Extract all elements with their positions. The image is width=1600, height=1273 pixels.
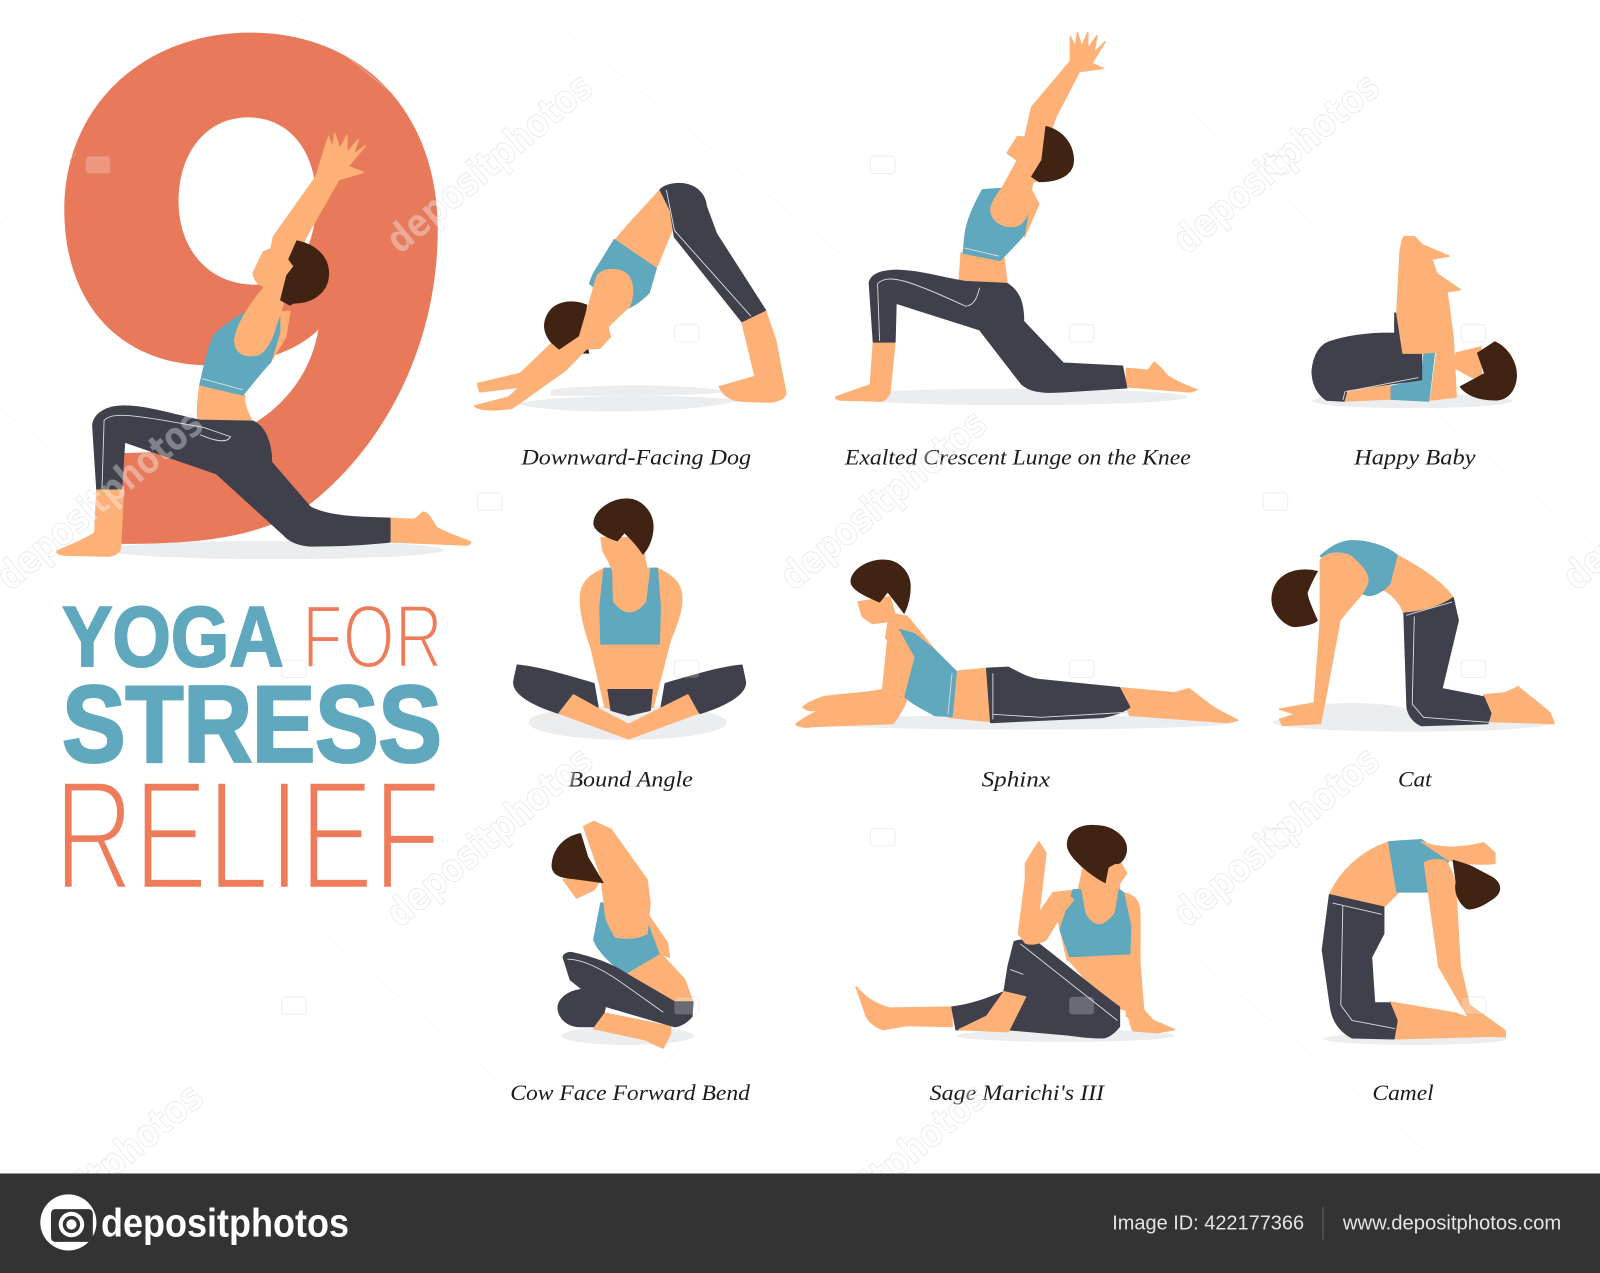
marichi leggings xyxy=(952,940,1119,1038)
dog hair xyxy=(545,302,589,353)
lunge back foot xyxy=(1127,362,1197,392)
divider xyxy=(1322,1207,1323,1240)
camel hair xyxy=(1453,860,1500,909)
hero leggings xyxy=(93,406,390,546)
cow waist xyxy=(626,953,693,1002)
text: depositphotos xyxy=(771,1075,996,1273)
bound feet xyxy=(559,695,698,739)
camel arm xyxy=(1424,860,1505,1037)
website: www.depositphotos.com xyxy=(1342,1213,1561,1235)
lunge hand xyxy=(1070,33,1105,71)
title word RELIEF: RELIEF xyxy=(54,748,441,923)
hero waist xyxy=(198,385,253,423)
pose: cat xyxy=(1272,541,1554,792)
title xyxy=(54,587,443,923)
baby hair xyxy=(1460,342,1516,400)
pose: cow face forward bend xyxy=(510,821,751,1105)
sphinx caption: Sphinx xyxy=(982,767,1050,792)
dog back leg and foot xyxy=(719,310,786,402)
lunge legging seams xyxy=(878,279,980,341)
lunge arm xyxy=(991,61,1085,227)
pose: bound angle xyxy=(514,499,745,792)
bound top xyxy=(600,568,660,644)
title word FOR: FOR xyxy=(302,587,443,687)
baby legs and arm xyxy=(1397,237,1460,400)
camel neck and head xyxy=(1421,842,1495,864)
sphinx shadow xyxy=(806,715,1235,730)
marichi extended leg and foot xyxy=(856,987,952,1030)
camel abdomen xyxy=(1330,842,1401,907)
cow caption: Cow Face Forward Bend xyxy=(510,1080,751,1105)
camel caption: Camel xyxy=(1372,1080,1434,1105)
baby shadow xyxy=(1312,394,1512,408)
lunge face xyxy=(1007,137,1046,182)
marichi legging seam xyxy=(1010,944,1117,1020)
big number 9 xyxy=(64,33,438,544)
baby top xyxy=(1390,350,1435,401)
camel shadow xyxy=(1323,1033,1507,1045)
marichi top xyxy=(1060,890,1131,958)
lunge shadow xyxy=(841,389,1188,405)
dog far arm xyxy=(478,344,566,392)
bound hair xyxy=(594,499,653,554)
cat top xyxy=(1320,541,1397,595)
cat shadows xyxy=(1272,713,1554,732)
image id: Image ID: 422177366 xyxy=(1112,1213,1304,1235)
hero shadow xyxy=(107,541,444,559)
cow top xyxy=(594,903,660,973)
baby thin leg back xyxy=(1395,313,1400,337)
text: depositphotos xyxy=(1164,64,1389,263)
cat foot xyxy=(1484,687,1554,723)
pose: sage marichi's III xyxy=(856,825,1174,1105)
cow crossed leg xyxy=(563,953,693,1027)
dog top xyxy=(590,240,656,310)
camel top xyxy=(1389,840,1449,892)
hero hair xyxy=(281,241,329,305)
marichi torso xyxy=(1053,890,1144,1016)
camel leggings xyxy=(1322,895,1397,1039)
sphinx face xyxy=(858,597,897,623)
cow hair xyxy=(552,834,603,883)
camel shin and foot xyxy=(1390,1002,1505,1039)
hero face xyxy=(253,245,294,288)
pose: camel xyxy=(1322,840,1507,1105)
dog near arm xyxy=(474,270,633,410)
pose: exalted crescent lunge xyxy=(836,33,1197,469)
dog caption: Downward-Facing Dog xyxy=(520,444,751,469)
dog face xyxy=(584,324,610,349)
marichi waist xyxy=(1067,955,1130,1010)
dog legging seam xyxy=(666,190,751,316)
marichi neck xyxy=(1078,860,1127,898)
sphinx leg and foot xyxy=(1119,688,1238,722)
bound caption: Bound Angle xyxy=(568,767,693,792)
sphinx legging seams xyxy=(993,673,1129,719)
cow shadow xyxy=(561,1027,694,1045)
cow side body xyxy=(643,907,669,957)
cow face xyxy=(563,878,602,898)
bound neck xyxy=(601,538,647,569)
cow lower knee xyxy=(558,990,605,1027)
cat hair xyxy=(1272,570,1317,627)
lunge front foot xyxy=(836,342,895,401)
baby legging seam xyxy=(1343,378,1418,400)
hero back skin xyxy=(270,311,290,362)
baby leggings xyxy=(1312,333,1421,401)
lunge waist xyxy=(959,253,1007,286)
text: depositphotos xyxy=(771,401,996,599)
cat caption: Cat xyxy=(1398,767,1432,792)
cow legging seam xyxy=(567,959,663,1012)
hero back foot xyxy=(390,512,470,545)
marichi raised arm xyxy=(1018,842,1073,944)
text: depositphotos xyxy=(378,738,602,936)
lunge leggings xyxy=(869,270,1127,392)
banner background xyxy=(0,1173,1600,1273)
bound left leg xyxy=(514,665,598,713)
cat arm and hands xyxy=(1280,553,1368,726)
dog shadows xyxy=(515,385,740,411)
cow raised arm xyxy=(584,821,650,938)
logo wordmark: depositphotos xyxy=(101,1202,349,1246)
camel legging seams xyxy=(1333,903,1395,1029)
pose: sphinx xyxy=(796,560,1238,792)
marichi shin and foot xyxy=(959,992,1026,1032)
sphinx top xyxy=(900,630,956,716)
sphinx neck and back xyxy=(886,613,935,653)
cat legging seams xyxy=(1406,602,1490,722)
dog leggings xyxy=(660,184,765,321)
footer banner xyxy=(0,1173,1600,1273)
bound torso and arms xyxy=(580,568,682,714)
lunge hair xyxy=(1032,127,1073,182)
sphinx hair xyxy=(851,560,910,613)
baby forearm xyxy=(1344,386,1390,401)
dog torso xyxy=(614,190,673,268)
hero legging seams xyxy=(102,415,231,488)
bound shadow xyxy=(529,705,727,740)
marichi caption: Sage Marichi's III xyxy=(930,1080,1106,1105)
lunge back skin xyxy=(1024,187,1039,237)
hero top xyxy=(200,311,280,395)
text: depositphotos xyxy=(1164,738,1389,936)
bound right leg xyxy=(661,665,745,713)
cat midriff xyxy=(1383,555,1453,613)
cat leggings xyxy=(1404,598,1491,726)
sphinx leggings xyxy=(987,667,1130,722)
cow foot xyxy=(594,1013,670,1048)
sphinx arm and hands xyxy=(796,630,914,727)
hero front foot xyxy=(57,487,123,556)
hero top band xyxy=(202,379,243,390)
lunge top xyxy=(963,187,1032,260)
hero hand xyxy=(316,134,365,180)
pose: happy baby xyxy=(1312,237,1516,469)
baby caption: Happy Baby xyxy=(1353,444,1476,469)
pose: downward-facing dog xyxy=(474,184,786,469)
lunge caption: Exalted Crescent Lunge on the Knee xyxy=(844,444,1191,469)
baby face xyxy=(1454,347,1482,380)
title word STRESS: STRESS xyxy=(62,664,442,785)
marichi shadow xyxy=(956,1030,1174,1042)
marichi support hand xyxy=(1127,1010,1174,1033)
hero figure: crescent lunge on the 9 xyxy=(57,134,470,559)
sphinx waist xyxy=(949,668,991,721)
cat shadow under torso xyxy=(1291,703,1413,723)
marichi hair xyxy=(1067,825,1127,883)
text: depositphotos xyxy=(378,64,602,263)
bound shorts xyxy=(608,690,652,715)
logo icon: camera xyxy=(40,1194,96,1251)
sphinx top band xyxy=(948,673,952,714)
title word YOGA: YOGA xyxy=(62,589,284,685)
lunge top band xyxy=(964,248,999,256)
hero arm and shoulder xyxy=(235,173,339,356)
